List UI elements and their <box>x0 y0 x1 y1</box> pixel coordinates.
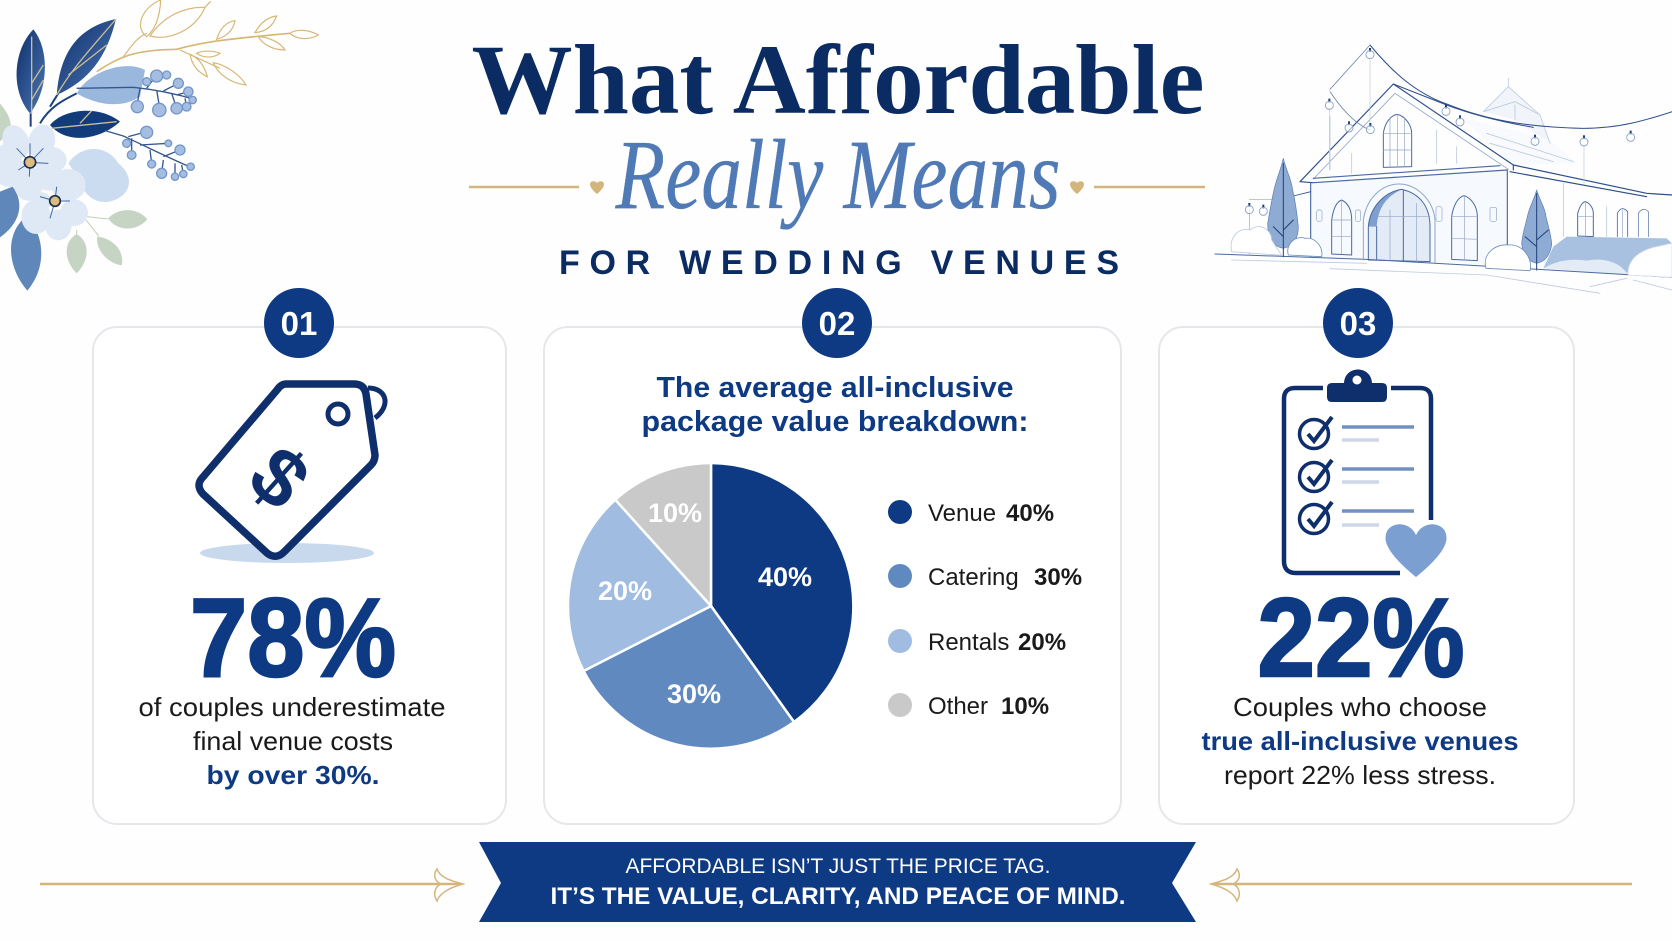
bottom ribbon banner: IT’S THE VALUE, CLARITY, AND PEACE OF MIND. <box>550 883 1126 910</box>
description: of couples underestimate <box>138 692 446 722</box>
number badge 01 <box>264 288 334 358</box>
divider left <box>469 181 604 194</box>
title: What Affordable <box>472 24 1204 135</box>
number badge 02: 02 <box>819 305 855 342</box>
pie labels: 20% <box>598 576 652 606</box>
legend: Rentals <box>928 629 1009 656</box>
venue sketch top right <box>1215 45 1672 293</box>
pie chart <box>568 463 853 749</box>
big stat: 78% <box>190 576 396 700</box>
icon: price tag <box>199 384 385 563</box>
subtitle: FOR WEDDING VENUES <box>559 244 1119 282</box>
gold flourish right <box>1211 869 1632 901</box>
number badge 01: 01 <box>281 305 317 342</box>
pie labels <box>598 498 812 709</box>
bottom ribbon banner <box>479 842 1196 922</box>
number badge 03 <box>1323 288 1393 358</box>
description: by over 30%. <box>206 760 380 790</box>
legend: 30% <box>1034 564 1082 591</box>
string lights <box>1249 45 1672 255</box>
trees <box>1268 158 1552 263</box>
number badge 03: 03 <box>1340 305 1376 342</box>
description: Couples who choose <box>1233 692 1487 722</box>
floral decoration top left <box>0 0 318 291</box>
door and windows <box>1332 114 1648 263</box>
legend: Other <box>928 693 988 720</box>
sage leaves <box>0 103 147 273</box>
berry sprays <box>77 75 197 177</box>
building lines <box>1215 84 1672 277</box>
pie labels: 10% <box>648 498 702 528</box>
gold sprig <box>97 0 318 85</box>
panel: 78 percent <box>93 288 506 824</box>
pie labels: 40% <box>758 562 812 592</box>
washes <box>1311 170 1507 265</box>
legend: Catering <box>928 564 1019 591</box>
card border <box>93 327 506 824</box>
pie labels: 30% <box>667 679 721 709</box>
panel: package breakdown <box>544 288 1121 824</box>
description <box>138 692 446 790</box>
panel heading: The average all-inclusive <box>656 372 1014 404</box>
divider right <box>1070 181 1205 194</box>
legend: 40% <box>1006 500 1054 527</box>
panel heading: package value breakdown: <box>642 406 1028 438</box>
flowers <box>0 121 88 240</box>
number badge 02 <box>802 288 872 358</box>
big stat: 22% <box>1258 576 1464 700</box>
description: true all-inclusive venues <box>1202 726 1518 756</box>
legend <box>888 500 1082 720</box>
card border <box>544 327 1121 824</box>
legend: Venue <box>928 500 996 527</box>
legend: 20% <box>1018 629 1066 656</box>
blue leaves <box>31 93 77 127</box>
icon: price tag: $ <box>232 429 326 527</box>
icon: clipboard with heart <box>1284 370 1448 579</box>
description: final venue costs <box>193 726 393 756</box>
bushes <box>1231 227 1672 277</box>
script subtitle: Really Means <box>615 119 1060 230</box>
pale round leaf <box>68 149 129 202</box>
description: report 22% less stress. <box>1224 760 1496 790</box>
icon: heart <box>1384 523 1448 579</box>
panel heading <box>642 372 1028 438</box>
bottom ribbon banner: AFFORDABLE ISN’T JUST THE PRICE TAG. <box>626 855 1050 878</box>
legend: 10% <box>1001 693 1049 720</box>
panel: 22 percent <box>1159 288 1574 824</box>
gold flourish left <box>40 869 463 901</box>
description <box>1202 692 1518 790</box>
card border <box>1159 327 1574 824</box>
tag shadow <box>200 543 374 563</box>
